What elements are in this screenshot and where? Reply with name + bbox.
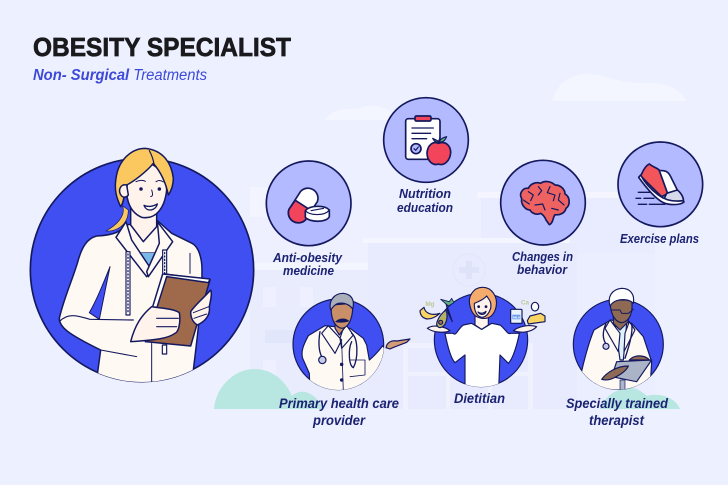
eyes, nose, mouth	[140, 188, 142, 190]
lapels	[116, 222, 152, 277]
label line 2: behavior	[517, 262, 568, 277]
label line 2: education	[397, 200, 453, 215]
label: Primary health care	[279, 395, 399, 411]
doctor illustration	[293, 293, 410, 395]
coat	[59, 220, 202, 397]
label line 2: therapist	[589, 412, 645, 428]
panel: primary health care provider	[279, 293, 410, 428]
panel: exercise plans	[618, 142, 703, 246]
hair	[115, 148, 173, 207]
infographic canvas	[30, 37, 704, 428]
label: Specially trained	[566, 395, 668, 411]
dietitian illustration: Mg	[425, 301, 435, 308]
mint hill left	[214, 369, 323, 409]
icon: pill and tablet	[266, 161, 351, 246]
ponytail	[106, 206, 128, 231]
label: Exercise plans	[620, 231, 699, 246]
panel: dietitian	[420, 287, 545, 406]
blue circle	[30, 158, 254, 382]
subtitle: Non- Surgical Treatments	[33, 67, 207, 84]
right hand	[191, 290, 211, 325]
panel: specially trained therapist	[566, 288, 668, 428]
mint hill right	[600, 388, 680, 409]
title: OBESITY SPECIALIST	[33, 32, 291, 62]
dietitian illustration: MILK	[513, 315, 521, 319]
book	[145, 274, 210, 346]
label: Dietitian	[454, 390, 505, 406]
measuring tape	[126, 252, 130, 315]
icon: brain	[501, 160, 585, 245]
panel: changes in behavior	[501, 160, 585, 277]
scrub top	[140, 252, 154, 264]
icon: running shoe	[618, 142, 703, 227]
therapist illustration	[573, 288, 663, 390]
panel: nutrition education	[384, 98, 468, 215]
icon: clipboard and apple	[384, 98, 468, 182]
label: Changes in	[512, 249, 573, 264]
main doctor illustration	[30, 148, 254, 397]
ear	[120, 185, 128, 197]
panel: anti-obesity medicine	[266, 161, 351, 278]
label: Anti-obesity	[272, 250, 343, 265]
dietitian illustration: Ca	[521, 300, 530, 307]
background hospital and clouds	[250, 74, 686, 409]
neck and face	[131, 203, 157, 242]
figure	[59, 220, 202, 397]
left hand	[131, 307, 180, 342]
label line 2: provider	[312, 412, 366, 428]
dietitian illustration	[420, 287, 545, 390]
label: Nutrition	[399, 186, 451, 201]
label line 2: medicine	[283, 263, 334, 278]
